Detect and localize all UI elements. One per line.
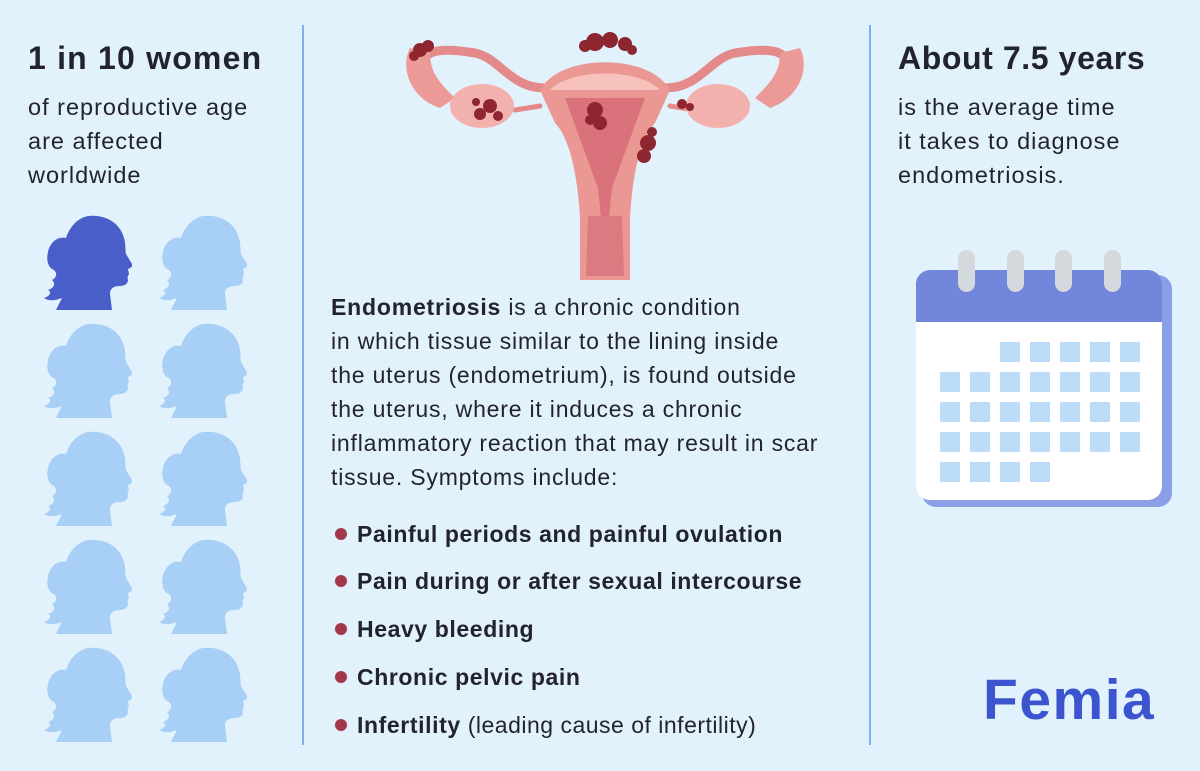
text: endometriosis description: the uterus (endometrium), is found outside xyxy=(331,362,797,388)
text: reproductive age: worldwide xyxy=(28,162,142,188)
list: symptoms: Chronic pelvic pain xyxy=(357,664,581,690)
list: symptoms: Infertility (leading cause of infertility) xyxy=(357,712,756,738)
list: symptoms xyxy=(335,521,802,738)
list: symptoms: Pain during or after sexual intercourse xyxy=(357,568,802,594)
heading: About 7.5 years: About 7.5 years xyxy=(898,40,1145,76)
icon grid: women heads xyxy=(44,216,247,742)
heading: 1 in 10 women: 1 in 10 women xyxy=(28,40,262,76)
list: symptoms: Painful periods and painful ovulation xyxy=(357,521,783,547)
text: diagnosis time: it takes to diagnose xyxy=(898,128,1120,154)
text: reproductive age: of reproductive age xyxy=(28,94,248,120)
text: diagnosis time: is the average time xyxy=(898,94,1116,120)
icon: calendar xyxy=(916,250,1172,507)
illustration: uterus xyxy=(406,32,804,280)
text: endometriosis description: tissue. Symptoms include: xyxy=(331,464,618,490)
icon: highlighted head xyxy=(44,216,132,310)
text: diagnosis time: endometriosis. xyxy=(898,162,1065,188)
list: symptoms: Heavy bleeding xyxy=(357,616,534,642)
text: endometriosis description: in which tissue similar to the lining inside xyxy=(331,328,779,354)
logo: Femia: Femia xyxy=(983,668,1155,732)
text: endometriosis description: Endometriosis is a chronic condition xyxy=(331,294,741,320)
text: endometriosis description: the uterus, where it induces a chronic xyxy=(331,396,742,422)
text: reproductive age xyxy=(28,94,248,188)
text: diagnosis time xyxy=(898,94,1120,188)
text: reproductive age: are affected xyxy=(28,128,164,154)
text: endometriosis description: inflammatory reaction that may result in scar xyxy=(331,430,818,456)
text: endometriosis description xyxy=(331,294,818,490)
